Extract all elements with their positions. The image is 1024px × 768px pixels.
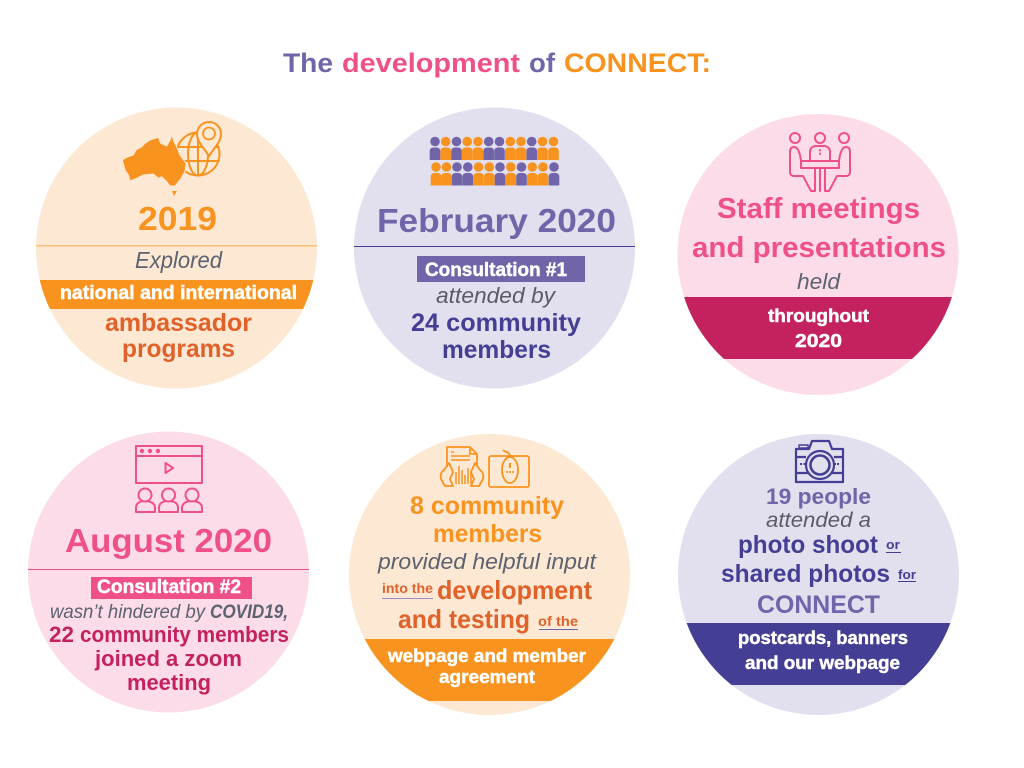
panel: 2019 xyxy=(36,108,317,388)
band: postcards, banners and our webpage xyxy=(678,623,959,685)
title xyxy=(283,48,711,78)
heading: staff meetings and presentations: Staff meetings xyxy=(717,193,920,225)
text: photo shoot or shared photos for: for xyxy=(898,567,916,582)
heading: staff meetings and presentations: and presentations xyxy=(692,232,946,264)
panel: staff meetings xyxy=(677,114,958,395)
band: webpage and member agreement: webpage and member xyxy=(387,646,586,666)
divider xyxy=(36,245,317,246)
text: 22 community members joined: meeting xyxy=(127,670,211,695)
text: explored: Explored xyxy=(135,247,223,273)
label: consultation 1: Consultation #1 xyxy=(425,260,567,281)
text: ambassador programs: programs xyxy=(122,335,235,363)
text: into the development and testing of the: and testing xyxy=(398,604,530,634)
text: 19 people: 19 people xyxy=(766,484,871,509)
band: webpage and member agreement: agreement xyxy=(439,667,535,687)
year heading: 2019 xyxy=(138,200,217,237)
text: into the development and testing of the xyxy=(382,575,592,634)
icon: document with hands and mouse xyxy=(441,447,529,487)
text: 22 community members joined: community members xyxy=(80,622,289,647)
text: 24 community members: 24 community xyxy=(411,309,581,337)
panel: photo shoot xyxy=(678,434,959,715)
text: 8 community members: members xyxy=(433,520,542,548)
text: into the development and testing of the: of the xyxy=(538,613,578,629)
title: The xyxy=(283,48,333,78)
text: hindered by covid: wasn’t hindered by xyxy=(50,602,206,623)
text: hindered by covid xyxy=(50,602,288,623)
text: photo shoot or shared photos for xyxy=(721,531,916,588)
band: postcards, banners and our webpage: postcards, banners xyxy=(738,628,908,648)
date heading: February 2020 xyxy=(377,202,616,239)
divider xyxy=(28,569,309,570)
label: consultation 1 xyxy=(417,256,585,282)
text: into the development and testing of the: development xyxy=(437,575,592,605)
band: national and international xyxy=(36,280,317,309)
text: into the development and testing of the: into the xyxy=(382,580,433,596)
panel: February 2020 xyxy=(354,108,635,388)
band: throughout 2020 xyxy=(677,297,958,359)
text: attended by: attended by xyxy=(436,283,557,308)
text: 22 community members joined xyxy=(49,622,289,695)
icon: Australia map with globe and pin xyxy=(122,122,221,196)
date heading: August 2020 xyxy=(65,522,272,559)
text: 22 community members joined: 22 xyxy=(49,622,74,647)
band: webpage and member agreement xyxy=(364,639,614,701)
title: of xyxy=(529,48,556,78)
title: development xyxy=(342,48,520,78)
text: 24 community members: members xyxy=(442,336,551,364)
text: photo shoot or shared photos for: photo shoot xyxy=(738,531,879,559)
band: throughout 2020: throughout xyxy=(768,306,869,326)
text: held: held xyxy=(797,269,841,294)
title: CONNECT: xyxy=(564,48,711,78)
text: 8 community members xyxy=(410,492,564,548)
text: photo shoot or shared photos for: shared photos xyxy=(721,560,890,588)
band: national and international: national and international xyxy=(60,283,297,304)
divider xyxy=(354,246,635,247)
icon: video window and viewers xyxy=(136,446,202,512)
band: throughout 2020: 2020 xyxy=(795,331,842,351)
text: 22 community members joined: joined a zoom xyxy=(94,646,242,671)
text: hindered by covid: COVID19, xyxy=(210,602,288,623)
label: consultation 2: Consultation #2 xyxy=(97,577,241,598)
text: photo shoot or shared photos for: or xyxy=(886,537,900,552)
icon: people meeting at a table xyxy=(790,133,850,191)
panel: community input xyxy=(349,434,630,715)
text: 24 community members xyxy=(411,309,581,364)
icon: camera xyxy=(796,441,843,482)
text: provided helpful input: provided helpful input xyxy=(377,549,597,574)
text: ambassador programs xyxy=(105,309,252,363)
text: attended a: attended a xyxy=(766,509,871,532)
text: 8 community members: 8 community xyxy=(410,492,564,520)
heading: staff meetings and presentations xyxy=(692,193,946,264)
text: ambassador programs: ambassador xyxy=(105,309,252,337)
panel: August 2020 xyxy=(28,432,309,712)
band: postcards, banners and our webpage: and our webpage xyxy=(745,653,900,673)
icon: crowd of people xyxy=(430,137,559,186)
text: CONNECT: CONNECT xyxy=(757,591,880,619)
